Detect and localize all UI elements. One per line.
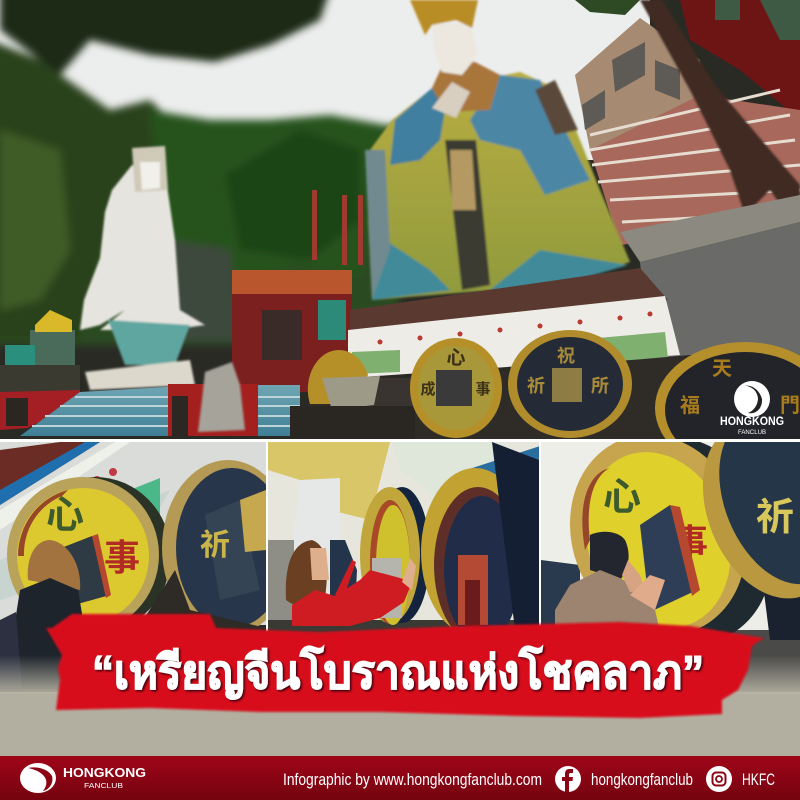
gold coin: dark blue: 祈: [527, 376, 545, 396]
coin characters: 心: [603, 477, 641, 519]
credit text: Infographic by www.hongkongfanclub.com: [283, 770, 542, 789]
gold coin: right: 天: [712, 358, 732, 380]
gold coin: right: 福: [680, 394, 700, 417]
small coin at left: [308, 350, 368, 404]
footer logo: [20, 763, 146, 793]
temple hall: [232, 292, 352, 392]
icon: instagram: [706, 766, 732, 792]
giant Tin Hau statue: [365, 0, 630, 300]
statue plinth with red dots: [350, 268, 668, 330]
footer logo: FANCLUB: [84, 783, 123, 790]
icon: facebook: [555, 766, 581, 792]
trees: [0, 0, 400, 345]
gold coin: yellow: 成: [420, 380, 436, 398]
bottom photo 3: man praying at coin: 事: [672, 522, 708, 563]
footer logo: HONGKONG: [63, 765, 146, 780]
offering urn: [322, 376, 380, 406]
bottom photo 3: man praying at coin: [541, 442, 800, 692]
gold coin: dark blue: [508, 330, 632, 438]
bottom photo 2: woman in red touching coins: [268, 442, 539, 634]
gold coin: dark blue: 所: [591, 376, 609, 396]
bottom photo 1: woman in black at coin: [0, 442, 266, 692]
gold coin: yellow: 事: [475, 380, 491, 398]
gold coin: yellow: 心: [446, 347, 466, 369]
right building: [575, 18, 700, 150]
sky: [0, 0, 650, 160]
dark ground under coins: [626, 355, 692, 360]
grey tile wall: [640, 222, 800, 360]
stone lion: [198, 362, 245, 432]
title: “เหรียญจีนโบราณแห่งโชคลาภ”: [92, 645, 704, 699]
top photo: temple courtyard: [0, 0, 800, 474]
footer bar: [0, 756, 800, 800]
left shrine: [30, 330, 75, 365]
watermark logo: HONGKONG: [720, 414, 784, 428]
watermark logo: [720, 381, 784, 436]
gold coin: dark blue: 祝: [557, 346, 575, 366]
tree trunk: [639, 0, 800, 207]
balcony railings: [590, 95, 800, 245]
facebook handle: hongkongfanclub: [591, 770, 693, 789]
gold coin: right: 門: [780, 395, 800, 417]
bottom photo 1: woman in black at coin: 事: [104, 537, 140, 578]
instagram handle: HKFC: [742, 770, 775, 789]
watermark logo: FANCLUB: [738, 429, 766, 436]
coin characters: 心: [46, 495, 84, 537]
gold coin: right: [655, 342, 800, 439]
white Guan Yin statue: [80, 146, 205, 390]
fade to beige background: [0, 655, 800, 756]
bottom photo 1: woman in black at coin: 祈: [200, 529, 230, 562]
red brush stroke banner: [46, 614, 764, 718]
bottom photo 3: man praying at coin: 祈: [756, 497, 794, 539]
blue stone stairs: [20, 385, 300, 436]
gold coin: yellow: [410, 338, 502, 438]
